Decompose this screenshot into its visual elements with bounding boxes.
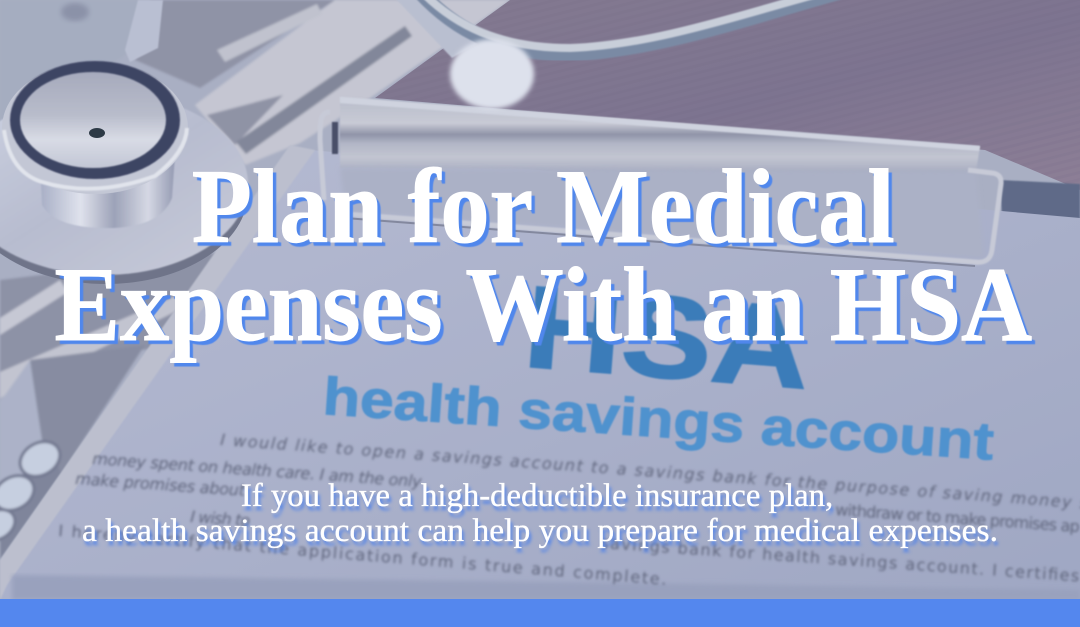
wooden table [340,0,1080,190]
subtitle: a health savings account can help you prepare for medical expenses. [82,513,998,549]
stethoscope chestpiece [0,61,248,284]
form body text: money spent on health care. I am the only [92,449,423,491]
form heading text: health savings account [321,367,996,472]
subtitle: If you have a high-deductible insurance plan, [241,478,833,514]
form body text: I would like to open a savings account to a savings bank for the purpose of saving money s [220,430,1080,513]
form body text: savings bank for health savings account. I certifies [600,533,1080,585]
title: Plan for Medical [192,148,895,265]
title: Expenses With an HSA [54,246,1032,363]
stethoscope tubing [125,0,840,109]
form body text: I hereby certify that the application form is true and complete. [58,521,667,589]
clipboard clip [320,97,1001,266]
form body text: withdraw or to make promises ap [835,500,1080,536]
dark clipboard edge [1000,180,1080,222]
form heading text: HSA [520,261,814,413]
title [54,148,1036,367]
form heading text [321,261,996,472]
bottom blue bar [0,599,1080,627]
form paper [0,145,1080,600]
form body text [58,430,1080,589]
form body text: make promises about [75,469,246,500]
form body text: I wish to [190,507,251,530]
subtitle [82,478,1000,554]
